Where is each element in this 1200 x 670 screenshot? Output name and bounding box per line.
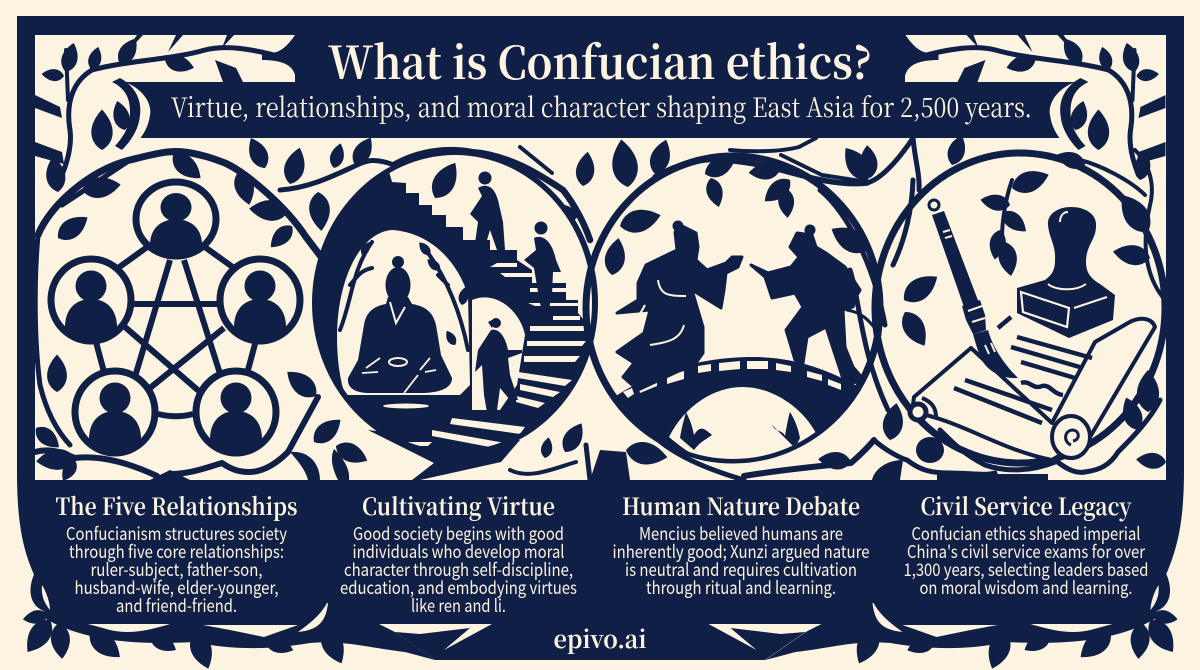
vines and leaves around the panels (31, 132, 1167, 484)
meditating figure (348, 256, 452, 393)
body text: education, and embodying virtues (340, 575, 577, 600)
body text (904, 521, 1148, 600)
right node (220, 259, 300, 341)
column: human nature debate (612, 488, 870, 600)
body text: like ren and li. (411, 593, 506, 618)
body text: on moral wisdom and learning. (920, 575, 1132, 600)
subtitle: Virtue, relationships, and moral character shaping East Asia for 2,500 years. (171, 86, 1032, 125)
body text: husband-wife, elder-younger, (74, 575, 278, 600)
left node (51, 259, 131, 341)
body text: 1,300 years, selecting leaders based (904, 557, 1148, 582)
body text: is neutral and requires cultivation (625, 557, 857, 582)
decorative vine: bottom left (19, 570, 492, 670)
top node (136, 182, 216, 258)
meditation trees (337, 240, 470, 350)
body text: Confucian ethics shaped imperial (912, 521, 1141, 546)
brand footer: epivo.ai (554, 620, 646, 655)
column: cultivating virtue (340, 488, 577, 618)
connecting lines (96, 245, 255, 416)
body text: character through self-discipline, (344, 557, 573, 582)
stairs and openings (337, 155, 592, 447)
body text: Mencius believed humans are (639, 521, 843, 546)
body text: inherently good; Xunzi argued nature (612, 539, 870, 564)
scroll (910, 317, 1155, 460)
body text: individuals who develop moral (352, 539, 565, 564)
body text: Confucianism structures society (66, 521, 287, 546)
decorative corner vine: top right (890, 34, 1166, 175)
bottom right node (196, 371, 276, 453)
cream cut-out windows (35, 35, 1166, 480)
stamp (1017, 207, 1115, 338)
circle ring (875, 153, 1165, 463)
decorative vine: bottom right (708, 570, 1181, 670)
heading: Human Nature Debate (622, 488, 860, 522)
body text (612, 521, 870, 600)
debating scholar right (751, 224, 880, 385)
body text: and friend-friend. (116, 593, 237, 618)
climbing figures (426, 158, 561, 418)
brush (929, 200, 1018, 378)
body text (66, 521, 287, 618)
column: the five relationships (56, 488, 298, 618)
heading: Cultivating Virtue (362, 488, 555, 522)
panel: civil service legacy circle (875, 153, 1165, 463)
body text (340, 521, 577, 618)
heading: Civil Service Legacy (920, 488, 1132, 522)
body text: through five core relationships: (69, 539, 284, 564)
decorative corner vine: top left (35, 34, 310, 175)
circle base (312, 150, 598, 456)
body text: through ritual and learning. (646, 575, 836, 600)
bottom left node (75, 371, 155, 453)
body text: ruler-subject, father-son, (90, 557, 262, 582)
heading: The Five Relationships (56, 488, 298, 522)
circle ring (586, 156, 880, 460)
debating scholar left (617, 220, 742, 390)
panel: five relationships diagram (51, 182, 300, 453)
panel: cultivating virtue circle (312, 153, 598, 447)
column: civil service legacy (904, 488, 1148, 600)
bridge (617, 357, 856, 459)
panel: human nature debate circle (586, 156, 880, 470)
title: What is Confucian ethics? (328, 27, 872, 92)
body text: China's civil service exams for over (907, 539, 1145, 564)
body text: Good society begins with good (353, 521, 564, 546)
